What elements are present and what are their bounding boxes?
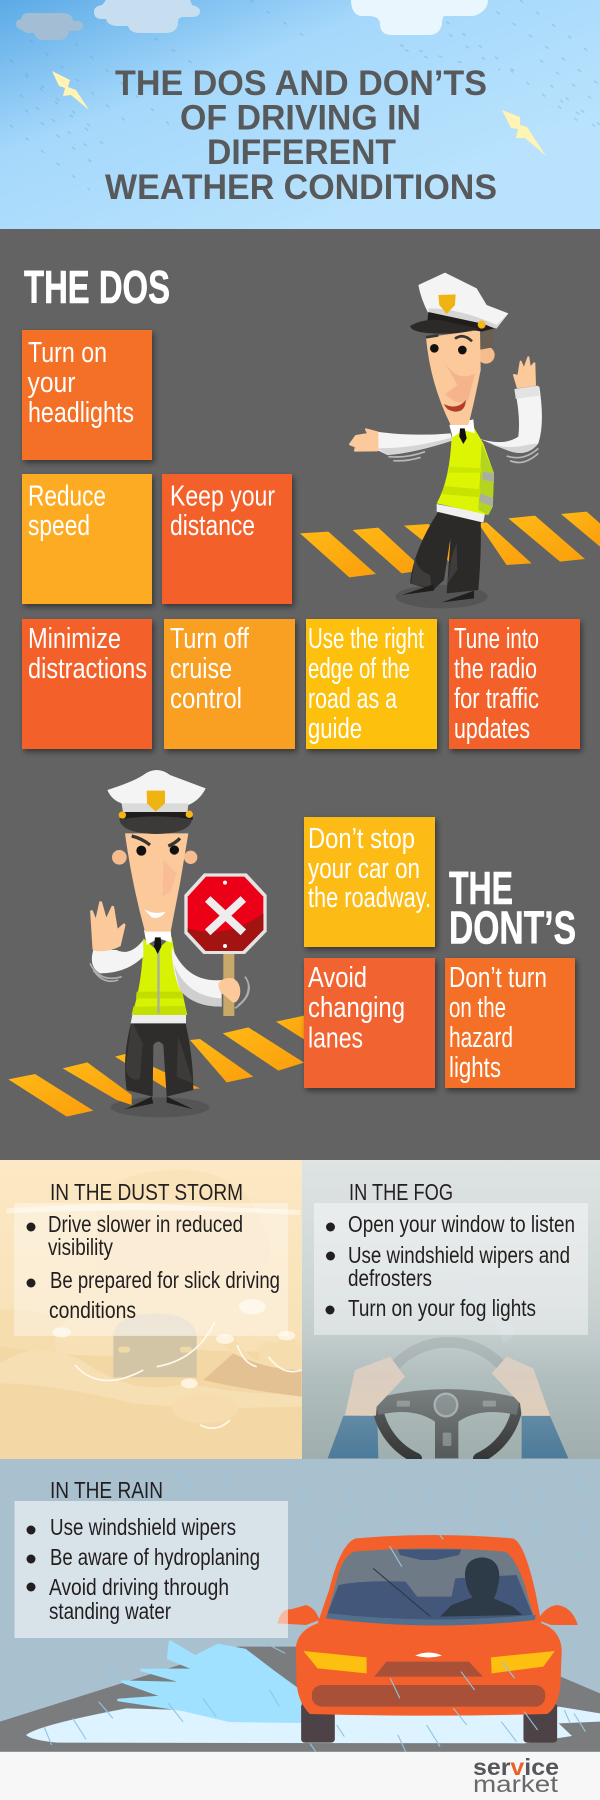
box: tune into the radio for traffic updates	[449, 619, 580, 749]
box: use the right edge of the road as a guide: road as a	[308, 683, 398, 715]
box: don't turn on the hazard lights: on the	[449, 992, 506, 1024]
icon: lightning left	[52, 71, 89, 110]
heading: the donts	[449, 862, 576, 954]
box: don't turn on the hazard lights: lights	[449, 1052, 501, 1084]
box: use the right edge of the road as a guide: Use the right	[308, 623, 424, 655]
icon: grey cloud	[16, 13, 83, 40]
box: minimize distractions	[22, 619, 152, 749]
panel: road background	[0, 229, 600, 1160]
panel: in the rain	[0, 1459, 600, 1752]
box: use the right edge of the road as a guide	[306, 619, 437, 749]
box: don't stop your car on the roadway: your car on	[308, 853, 420, 885]
box: turn on your headlights	[22, 330, 152, 460]
box: keep your distance: Keep your	[170, 480, 275, 512]
box: keep your distance: distance	[170, 510, 255, 542]
box: minimize distractions: Minimize	[28, 623, 121, 655]
list: fog tips: Turn on your fog lights	[348, 1295, 536, 1321]
illustration: traffic officer holding stop sign	[8, 770, 304, 1117]
illustration: hands on steering wheel	[328, 1255, 568, 1458]
list: dust storm tips: Drive slower in reduced	[48, 1211, 243, 1237]
logo: service market	[473, 1754, 559, 1797]
box: don't turn on the hazard lights: hazard	[449, 1022, 513, 1054]
overlay card	[14, 1501, 288, 1638]
heading: in the dust storm: IN THE DUST STORM	[50, 1179, 243, 1205]
panel: footer	[0, 1752, 600, 1800]
panel: in the fog	[302, 1160, 600, 1459]
title: DIFFERENT	[207, 133, 396, 172]
list: rain tips: Avoid driving through	[49, 1574, 229, 1600]
box: keep your distance	[162, 474, 292, 604]
panel: in the dust storm	[0, 1160, 302, 1459]
box: minimize distractions: distractions	[28, 653, 147, 685]
icon: lightning right	[502, 110, 546, 156]
box: don't stop your car on the roadway	[304, 817, 435, 947]
box: don't turn on the hazard lights	[445, 958, 575, 1088]
box: reduce speed: speed	[28, 510, 90, 542]
rain dashes in the sky	[10, 0, 600, 190]
list: dust storm tips	[26, 1211, 280, 1323]
heading: the donts: THE	[449, 862, 513, 914]
list: rain tips: standing water	[49, 1598, 171, 1624]
box: tune into the radio for traffic updates: for traffic	[454, 683, 539, 715]
box: don't stop your car on the roadway: the roadway.	[308, 882, 431, 914]
list: fog tips	[326, 1211, 575, 1321]
icon: white cloud	[351, 0, 488, 35]
box: tune into the radio for traffic updates: Tune into	[454, 623, 539, 655]
logo: service market: service	[473, 1754, 559, 1780]
box: tune into the radio for traffic updates: the radio	[454, 653, 537, 685]
heading: the dos: THE DOS	[24, 261, 170, 313]
illustration: car splashing on road in rain	[0, 1472, 600, 1752]
box: use the right edge of the road as a guide: guide	[308, 713, 362, 745]
box: turn on your headlights: Turn on	[28, 337, 107, 369]
box: turn off cruise control: cruise	[170, 653, 232, 685]
box: don't turn on the hazard lights: Don’t turn	[449, 962, 547, 994]
box: turn off cruise control: control	[170, 683, 242, 715]
title	[105, 64, 497, 207]
box: avoid changing lanes: Avoid	[308, 962, 367, 994]
box: tune into the radio for traffic updates: updates	[454, 713, 530, 745]
box: turn off cruise control	[164, 619, 295, 749]
list: rain tips: Be aware of hydroplaning	[50, 1544, 260, 1570]
box: turn on your headlights: headlights	[28, 397, 134, 429]
title: WEATHER CONDITIONS	[105, 168, 497, 207]
list: dust storm tips: visibility	[48, 1234, 113, 1260]
list: dust storm tips: Be prepared for slick driving	[50, 1267, 280, 1293]
title: THE DOS AND DON’TS	[115, 64, 487, 103]
panel: the dos boxes	[22, 330, 580, 749]
fog overlay	[302, 1160, 600, 1459]
panel: header	[0, 0, 600, 229]
overlay card	[314, 1203, 588, 1335]
box: reduce speed: Reduce	[28, 480, 106, 512]
list: fog tips: defrosters	[348, 1265, 432, 1291]
overlay card	[14, 1203, 288, 1336]
heading: in the fog: IN THE FOG	[349, 1179, 453, 1205]
illustration: traffic officer waving on crossing	[300, 273, 600, 608]
logo: service market: market	[473, 1771, 559, 1797]
heading: in the rain: IN THE RAIN	[50, 1477, 163, 1503]
box: don't stop your car on the roadway: Don’t stop	[308, 823, 415, 855]
box: use the right edge of the road as a guide: edge of the	[308, 653, 410, 685]
box: turn on your headlights: your	[28, 367, 76, 399]
list: dust storm tips: conditions	[49, 1297, 136, 1323]
box: avoid changing lanes	[304, 958, 435, 1088]
box: reduce speed	[22, 474, 152, 604]
illustration: dust storm with car	[0, 1170, 302, 1458]
box: avoid changing lanes: lanes	[308, 1022, 363, 1054]
box: turn off cruise control: Turn off	[170, 623, 250, 655]
icon: middle cloud	[94, 0, 200, 33]
list: rain tips	[26, 1514, 260, 1624]
box: avoid changing lanes: changing	[308, 992, 405, 1024]
list: rain tips: Use windshield wipers	[50, 1514, 236, 1540]
title: OF DRIVING IN	[180, 98, 421, 138]
panel: the donts boxes	[304, 817, 575, 1088]
